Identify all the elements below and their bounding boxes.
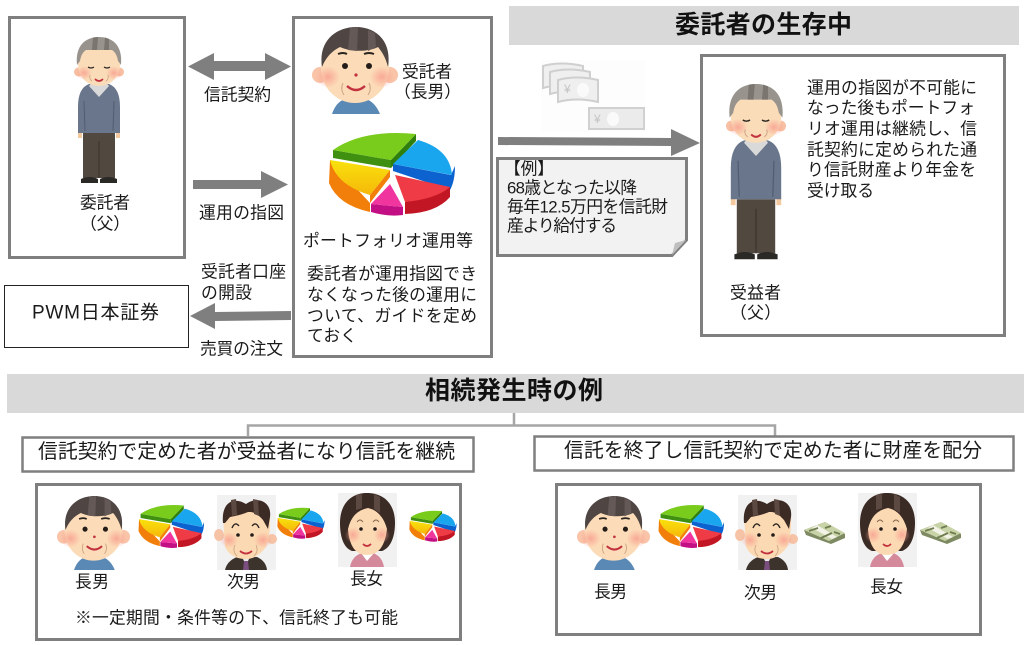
- label: beneficiary: 受益者: [730, 284, 781, 302]
- label: eldest son: 長男: [594, 582, 627, 602]
- heading: inheritance example: [7, 374, 1024, 413]
- text: beneficiary description: リオ運用は継続し、信: [807, 120, 977, 138]
- arrow: trust contract: [188, 53, 291, 80]
- heading: continue trust: 信託契約で定めた者が受益者になり信託を継続: [38, 441, 455, 463]
- text: trustee guidance: ておく: [307, 326, 357, 346]
- text: trustee guidance: [307, 264, 477, 346]
- arrow: to securities firm: [190, 303, 291, 329]
- note: example: 産より給付する: [507, 216, 617, 236]
- label: trade orders: 売買の注文: [200, 340, 283, 358]
- label: trust contract: 信託契約: [204, 86, 271, 104]
- box: securities firm: [4, 286, 188, 348]
- label: second son: 次男: [744, 584, 777, 602]
- arrow: payment to beneficiary: [498, 129, 700, 156]
- text: beneficiary description: り信託財産より年金を: [807, 160, 976, 180]
- text: trustee guidance: なくなった後の運用に: [307, 286, 477, 304]
- label: trustee: [394, 62, 461, 102]
- icon: pie: [139, 505, 204, 548]
- text: trustee guidance: ついて、ガイドを定め: [307, 306, 477, 326]
- label: beneficiary: [730, 284, 781, 322]
- label: trustee: 受託者: [402, 62, 452, 82]
- label: second son: 次男: [227, 572, 260, 592]
- icon: yen bills: [541, 60, 645, 132]
- label: beneficiary: （父）: [730, 304, 781, 322]
- heading: during settlor lifetime: [509, 6, 1019, 45]
- heading: during settlor lifetime: 委託者の生存中: [675, 11, 852, 39]
- text: trustee guidance: 委託者が運用指図でき: [307, 264, 477, 284]
- box: securities firm: PWM日本証券: [32, 302, 159, 324]
- label: open trustee account: 受託者口座: [201, 262, 286, 282]
- label: eldest daughter: 長女: [350, 570, 383, 588]
- icon: cash: [920, 522, 961, 544]
- label: settlor: 委託者: [80, 194, 130, 212]
- icon: eldest daughter: [338, 493, 397, 567]
- icon: small pie: [277, 508, 325, 539]
- icon: father settlor: [74, 37, 124, 183]
- chart icon: portfolio pie: [329, 133, 455, 216]
- panel: settlor: [10, 18, 184, 258]
- text: beneficiary description: なった後もポートフォ: [807, 98, 975, 118]
- text: beneficiary description: [807, 78, 977, 200]
- icon: eldest son: [57, 496, 130, 570]
- label: open trustee account: の開設: [201, 284, 252, 302]
- heading: terminate trust: 信託を終了し信託契約で定めた者に財産を配分: [564, 440, 982, 462]
- label: eldest son: 長男: [75, 572, 109, 592]
- label: eldest daughter: 長女: [870, 578, 903, 596]
- label: portfolio management: ポートフォリオ運用等: [303, 232, 473, 250]
- panel: beneficiary: [702, 56, 1004, 336]
- icon: yen bills: ¥: [593, 112, 601, 126]
- panel: trustee: [294, 18, 492, 356]
- text: beneficiary description: 託契約に定められた通: [807, 140, 977, 160]
- text: beneficiary description: 受け取る: [807, 182, 874, 200]
- note: example: [498, 158, 686, 256]
- icon: second son: [214, 495, 277, 570]
- icon: eldest daughter: [858, 493, 917, 567]
- label: investment instruction: 運用の指図: [199, 204, 284, 222]
- icon: pie: [659, 505, 724, 548]
- text: beneficiary description: 運用の指図が不可能に: [807, 78, 977, 98]
- note: termination possible: ※一定期間・条件等の下、信託終了も可能: [75, 608, 398, 628]
- icon: yen bills: ¥: [563, 82, 571, 96]
- connector: inheritance options: [248, 413, 775, 436]
- icon: second son: [735, 495, 798, 570]
- note: example: 毎年12.5万円を信託財: [507, 198, 668, 216]
- heading: terminate trust: [534, 436, 1014, 470]
- note: example: 68歳となった以降: [507, 178, 637, 198]
- panel: continue trust example: [36, 484, 460, 640]
- heading: inheritance example: 相続発生時の例: [425, 377, 603, 405]
- arrow: investment instruction: [193, 171, 288, 198]
- icon: eldest son trustee: [312, 27, 398, 114]
- heading: continue trust: [22, 438, 474, 472]
- icon: cash: [804, 522, 845, 544]
- label: open trustee account: [201, 262, 286, 302]
- panel: terminate trust example: [556, 484, 980, 634]
- icon: eldest son: [577, 496, 650, 570]
- label: trustee: （長男）: [394, 82, 461, 102]
- note: example: 【例】: [504, 160, 554, 178]
- icon: small pie: [409, 511, 457, 542]
- label: settlor: [80, 194, 130, 234]
- icon: father beneficiary: [726, 84, 786, 259]
- label: settlor: （父）: [80, 214, 130, 234]
